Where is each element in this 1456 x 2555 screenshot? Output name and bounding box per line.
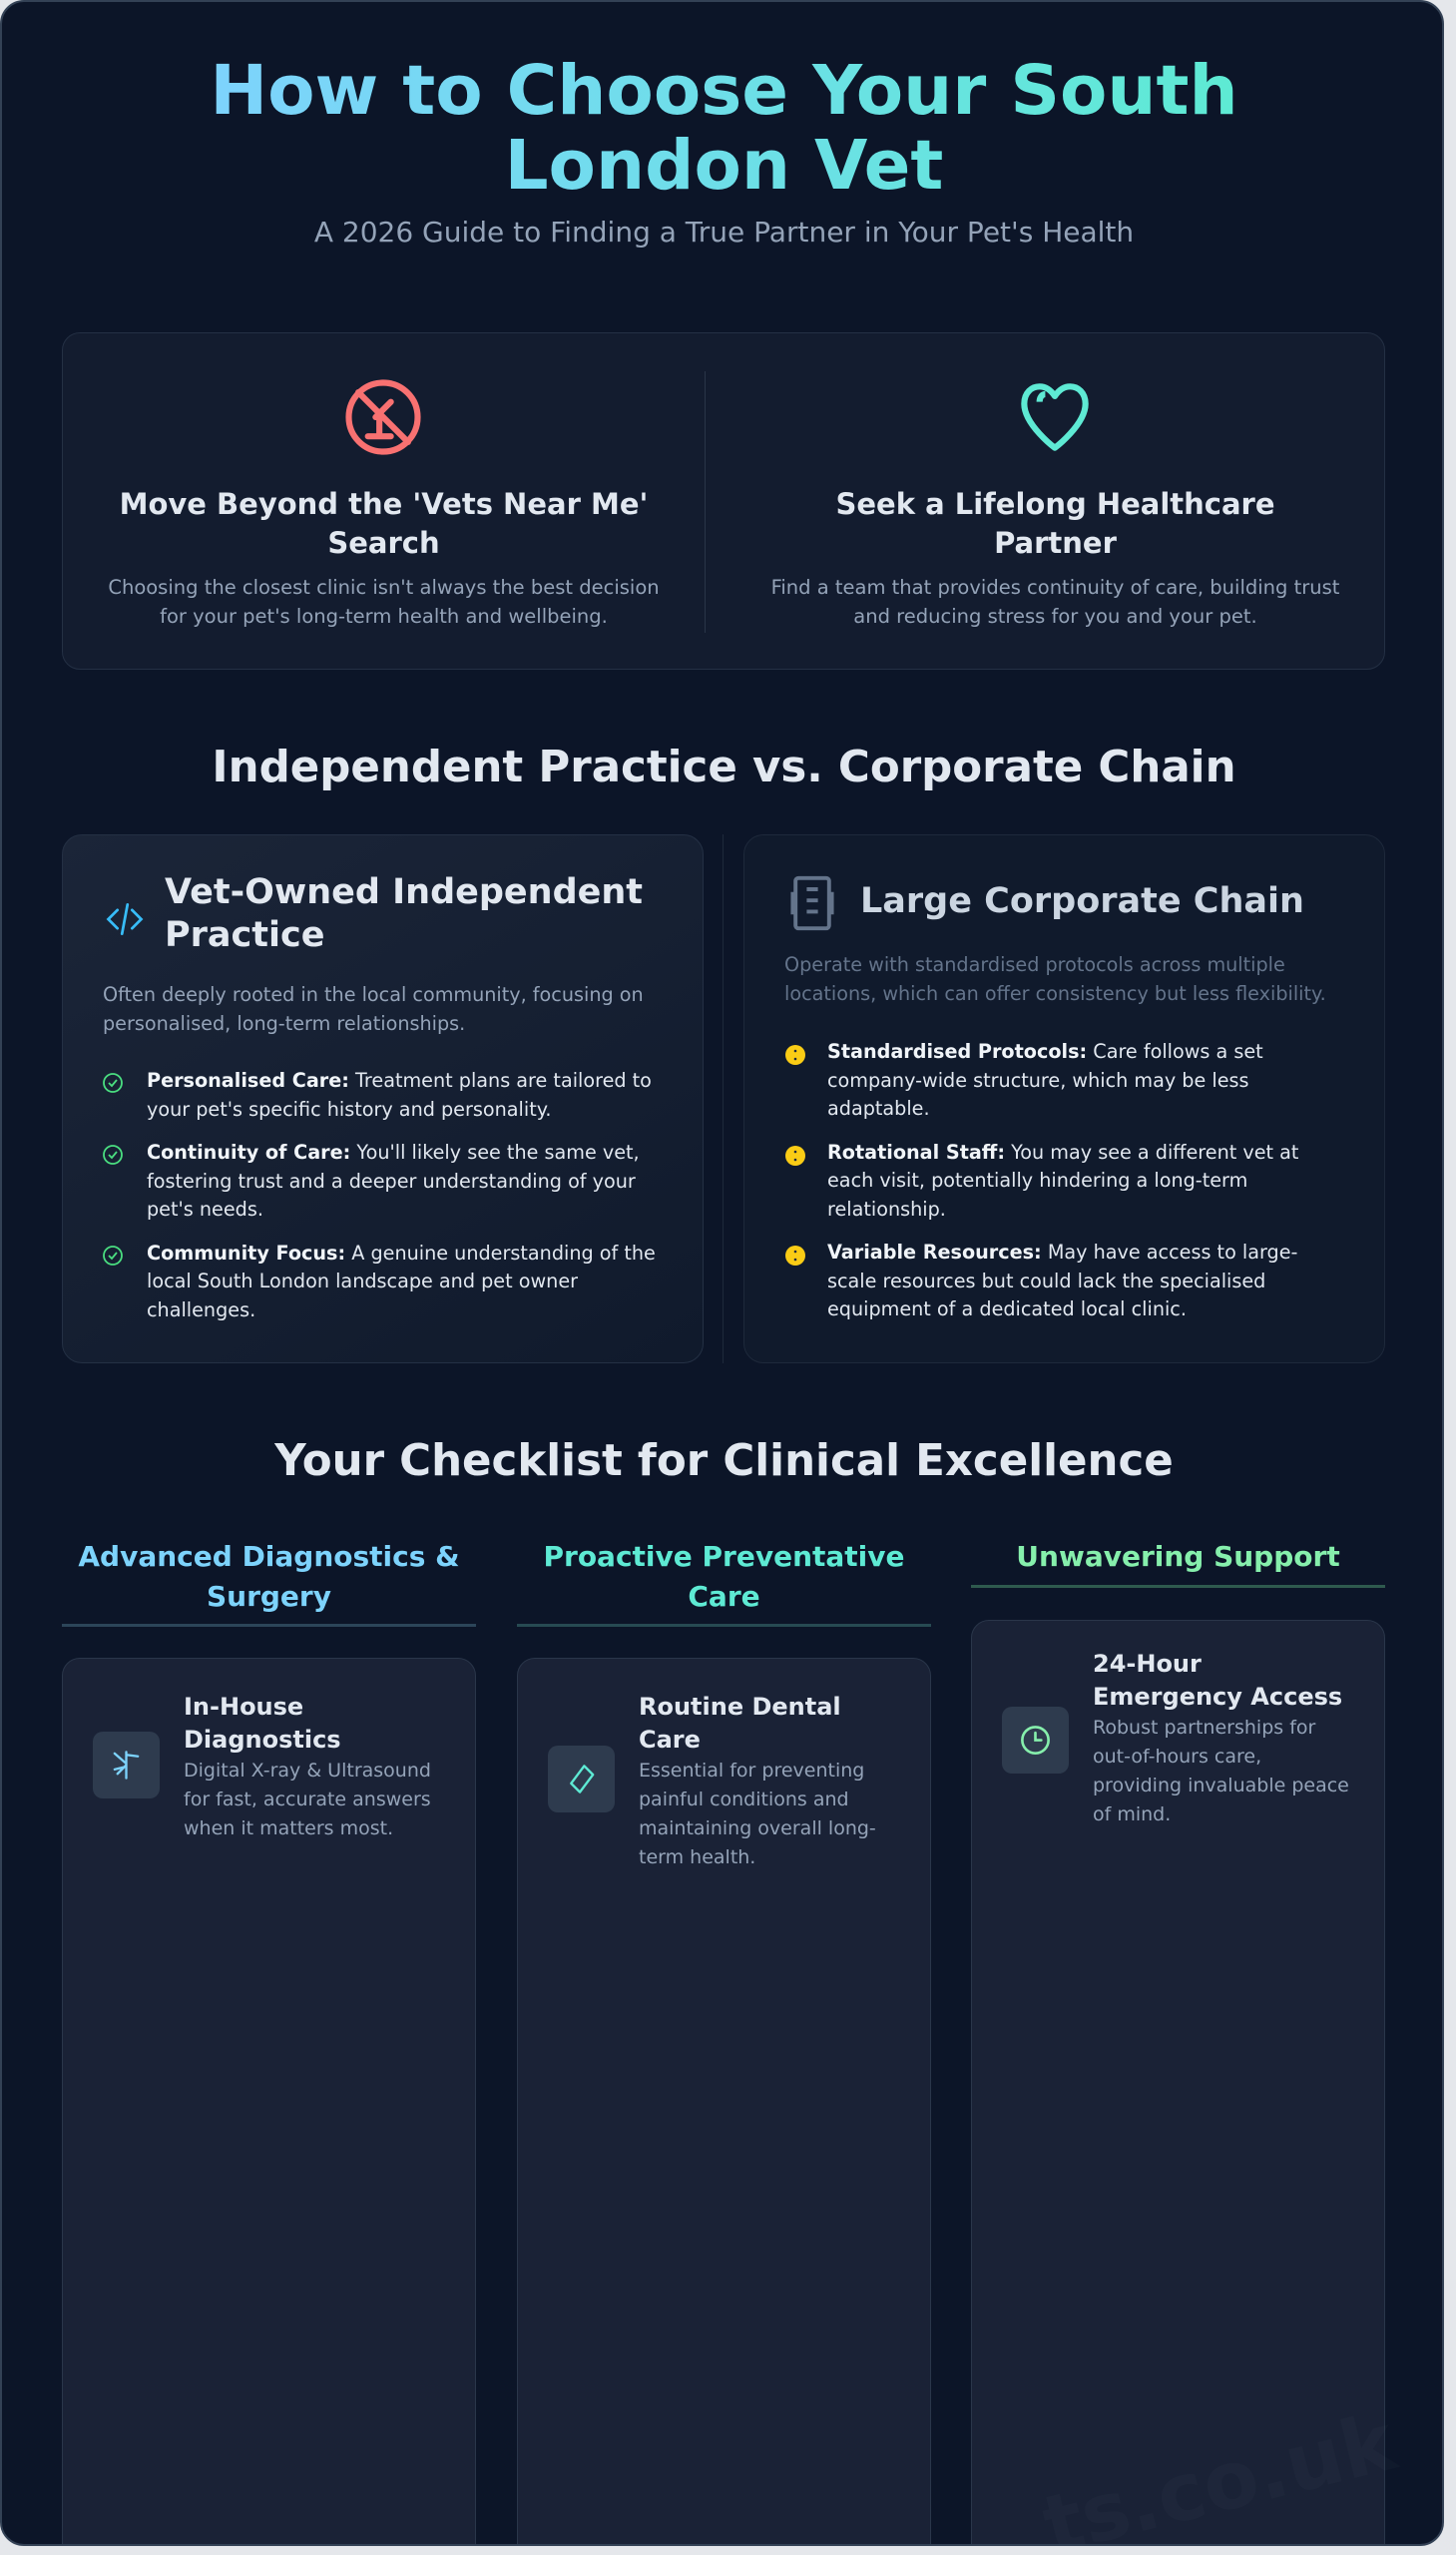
panel: corporate: Operate with standardised protocols across multiple locations, which can offer consistency but less flexibility. bbox=[784, 953, 1326, 1005]
card: in-house diagnostics: In-House Diagnostics bbox=[184, 1693, 341, 1754]
title bbox=[2, 54, 1446, 204]
bullet list bbox=[785, 1040, 1298, 1320]
card: emergency: Robust partnerships for out-of-hours care, providing invaluable peace of mind. bbox=[1093, 1717, 1349, 1825]
column: diagnostics: Advanced Diagnostics & Surgery bbox=[78, 1540, 460, 1613]
icon: xray bbox=[93, 1732, 160, 1798]
subtitle: A 2026 Guide to Finding a True Partner in Your Pet's Health bbox=[314, 216, 1134, 249]
card: dental bbox=[517, 1658, 931, 2555]
icon: tooth bbox=[548, 1746, 615, 1812]
bullet list: Continuity of Care: You'll likely see the same vet, fostering trust and a deeper understanding of your pet's needs. bbox=[147, 1141, 640, 1221]
block: lifelong partner bbox=[771, 383, 1339, 628]
column: preventative: Proactive Preventative Care bbox=[543, 1540, 905, 1613]
column: support bbox=[971, 1540, 1385, 2544]
block: move beyond: Choosing the closest clinic isn't always the best decision for your pet's long-term health and wellbeing. bbox=[108, 576, 660, 628]
column: preventative bbox=[517, 1540, 931, 2544]
block: move beyond: Move Beyond the 'Vets Near Me' Search bbox=[120, 487, 648, 560]
panel: independent: Often deeply rooted in the local community, focusing on personalised, long-term relationships. bbox=[103, 983, 644, 1035]
card: dental: Routine Dental Care bbox=[639, 1693, 841, 1754]
bullet list: Personalised Care: Treatment plans are tailored to your pet's specific history and personality. bbox=[147, 1069, 652, 1120]
card: emergency: 24-Hour Emergency Access bbox=[1093, 1650, 1342, 1711]
bullet list bbox=[103, 1069, 656, 1321]
block: move beyond bbox=[108, 379, 660, 628]
icon: building bbox=[790, 876, 834, 930]
panel: corporate bbox=[743, 834, 1385, 1363]
bullet list: Rotational Staff: You may see a different vet at each visit, potentially hindering a long-term relationship. bbox=[827, 1140, 1298, 1220]
icon: no-search bbox=[345, 379, 421, 455]
title: London Vet bbox=[505, 126, 943, 206]
heading: comparison: Independent Practice vs. Corporate Chain bbox=[212, 743, 1236, 792]
title: How to Choose Your South bbox=[210, 51, 1238, 131]
panel: independent bbox=[62, 834, 704, 1363]
card: in-house diagnostics bbox=[62, 1658, 476, 2555]
card: emergency bbox=[971, 1620, 1385, 2555]
panel: independent: Vet-Owned Independent Practice bbox=[165, 872, 643, 955]
bullet list: Variable Resources: May have access to large-scale resources but could lack the specialised equipment of a dedicated local clinic. bbox=[827, 1241, 1297, 1320]
card: dental: Essential for preventing painful conditions and maintaining overall long-term health. bbox=[639, 1760, 876, 1868]
bullet list: Standardised Protocols: Care follows a set company-wide structure, which may be less adaptable. bbox=[827, 1040, 1263, 1120]
panel: intro bbox=[62, 332, 1385, 670]
icon: heart bbox=[1021, 383, 1089, 451]
panel: corporate: Large Corporate Chain bbox=[860, 881, 1304, 921]
column: diagnostics bbox=[62, 1540, 476, 2544]
block: lifelong partner: Seek a Lifelong Healthcare Partner bbox=[835, 487, 1275, 560]
bullet list: Community Focus: A genuine understanding of the local South London landscape and pet owner challenges. bbox=[147, 1242, 656, 1321]
block: lifelong partner: Find a team that provides continuity of care, building trust and reducing stress for you and your pet. bbox=[771, 576, 1339, 628]
card: in-house diagnostics: Digital X-ray & Ultrasound for fast, accurate answers when it matters most. bbox=[184, 1760, 431, 1839]
column: support: Unwavering Support bbox=[1016, 1540, 1340, 1573]
heading: checklist: Your Checklist for Clinical Excellence bbox=[274, 1436, 1174, 1486]
icon: clock bbox=[1002, 1707, 1069, 1774]
icon: code bbox=[106, 903, 144, 935]
